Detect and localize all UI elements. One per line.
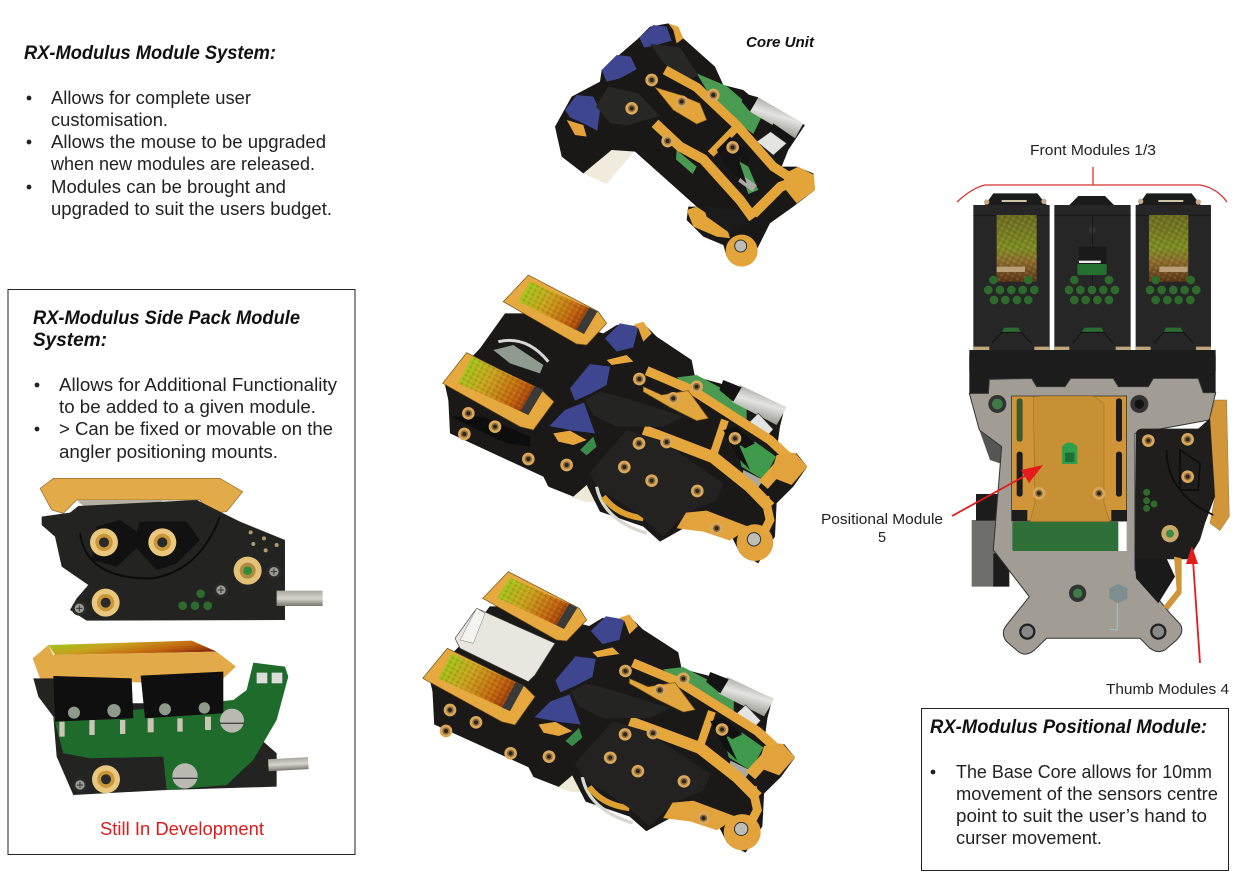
label: positional module: 5 (878, 530, 886, 546)
illustration: base core underside (969, 350, 1229, 654)
illustration: mouse with wheel side pack (443, 275, 807, 563)
label: positional module (821, 512, 943, 546)
bullet text: positional module: curser movement. (956, 827, 1102, 848)
label: core unit: Core Unit (746, 35, 815, 51)
bullet list: side pack: to be added to a given module. (59, 396, 316, 417)
heading: module system: RX-Modulus Module System: (24, 43, 276, 64)
label: thumb modules: Thumb Modules 4 (1106, 682, 1229, 698)
bullet list: module system: when new modules are released. (50, 153, 315, 174)
heading: side pack (33, 308, 300, 351)
bullet list: side pack: angler positioning mounts. (59, 441, 278, 462)
bullet text: positional module (931, 761, 1218, 848)
note: still in development: Still In Development (100, 818, 264, 839)
illustration: side pack module outer (40, 478, 323, 621)
bullet list: module system: customisation. (51, 109, 168, 130)
bullet list: module system: Allows the mouse to be upgraded (51, 131, 326, 152)
illustration: front modules top view (969, 193, 1216, 371)
heading: side pack: System: (33, 330, 107, 351)
bullet list: side pack: Allows for Additional Functionality (59, 374, 338, 395)
illustration: side pack module inner (33, 641, 309, 795)
panel border (922, 708, 1228, 870)
bullet list: module system: Modules can be brought and (51, 176, 286, 197)
bullet list: side pack: > Can be fixed or movable on the (59, 418, 333, 439)
panel: positional module (922, 708, 1228, 870)
arrow: thumb modules (1186, 546, 1200, 663)
bullet text: positional module: The Base Core allows for 10mm (956, 761, 1212, 782)
bullet list: module system: upgraded to suit the users budget. (51, 198, 332, 219)
bracket: front modules (957, 167, 1227, 202)
bullet text: positional module: movement of the sensors centre (956, 783, 1218, 804)
panel border (8, 290, 355, 854)
bullet text: positional module: point to suit the user’s hand to (956, 805, 1207, 826)
arrow: positional module (952, 465, 1043, 516)
bullet list: module system: Allows for complete user (51, 87, 251, 108)
bullet list: module system (27, 87, 332, 219)
label: positional module: Positional Module (821, 512, 943, 528)
panel: module system text (24, 43, 332, 219)
panel: side pack module system (8, 290, 355, 854)
heading: positional module: RX-Modulus Positional Module: (930, 717, 1207, 738)
heading: side pack: RX-Modulus Side Pack Module (33, 308, 300, 329)
illustration: mouse with storage side pack (423, 572, 795, 853)
label: front modules: Front Modules 1/3 (1030, 143, 1156, 159)
bullet list: side pack (35, 374, 338, 462)
illustration: core unit (555, 23, 815, 267)
